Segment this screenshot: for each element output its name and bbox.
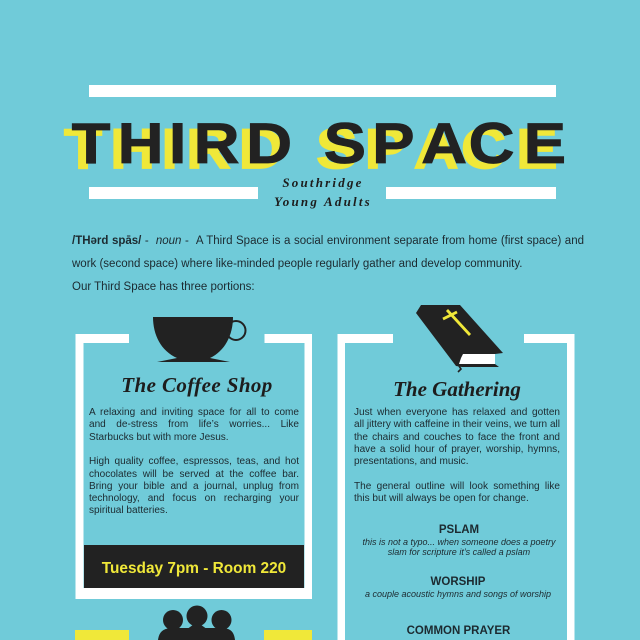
lower right white bar xyxy=(386,187,556,199)
item: Common Prayer: COMMON PRAYER xyxy=(407,625,510,637)
title: THIRD SPACE: THIRD SPACE xyxy=(72,111,566,175)
item: Worship: WORSHIP xyxy=(431,576,485,588)
item: Worship: a couple acoustic hymns and songs of worship xyxy=(365,588,551,598)
yellow frame left piece xyxy=(75,630,129,640)
panel: the gathering xyxy=(338,305,574,640)
icon: bible xyxy=(416,305,503,373)
panel frame: coffee shop xyxy=(76,334,312,599)
item: Pslam: PSLAM xyxy=(439,524,479,536)
icon: group of people xyxy=(158,606,235,640)
top white bar xyxy=(89,85,556,97)
heading: The Coffee Shop: The Coffee Shop xyxy=(121,373,273,397)
schedule banner: Tuesday 7pm - Room 220 xyxy=(102,560,286,577)
coffee shop description: Starbucks but with more Jesus. xyxy=(89,432,229,443)
item: Pslam: slam for scripture it’s called a pslam xyxy=(388,547,530,557)
definition text: Our Third Space has three portions: xyxy=(72,281,255,293)
coffee shop description: High quality coffee, espressos, teas, and hot xyxy=(89,456,299,467)
coffee shop description: technology, and focus on recharging your xyxy=(89,493,299,504)
subtitle: Southridge Young Adults: Southridge xyxy=(282,175,364,190)
definition text: /THərd spās/ - noun - A Third Space is a social environment separate from home (first space) and xyxy=(72,235,584,247)
coffee shop description: and de-stress from life’s worries... Like xyxy=(89,419,299,430)
gathering description: The general outline will look something like xyxy=(354,481,560,492)
definition text: work (second space) where like-minded people regularly gather and develop community. xyxy=(72,258,522,270)
schedule banner xyxy=(84,545,304,588)
gathering description: Just when everyone has relaxed and gotten xyxy=(354,407,560,418)
gathering description: this but will always be open for change. xyxy=(354,493,529,504)
panel frame: gathering xyxy=(338,334,574,640)
lower left white bar xyxy=(89,187,258,199)
gathering description: all jittery with caffeine in their veins, we turn all xyxy=(354,419,560,430)
yellow frame right piece xyxy=(264,630,312,640)
item: Pslam: this is not a typo... when someone does a poetry xyxy=(362,536,556,546)
item: Pslam xyxy=(362,524,556,557)
gathering description: the chairs and couches to face the front and xyxy=(354,432,560,442)
gathering description xyxy=(354,407,560,504)
coffee shop description: Bring your bible and a journal, unplug from xyxy=(89,481,299,492)
gathering description: presentations, and music. xyxy=(354,456,468,467)
definition text xyxy=(72,235,584,293)
heading: The Gathering: The Gathering xyxy=(393,377,521,401)
subtitle: Southridge Young Adults: Young Adults xyxy=(274,194,372,208)
item: Worship xyxy=(365,576,551,599)
gathering description: have a solid hour of prayer, worship, hymns, xyxy=(354,444,560,455)
coffee shop description: chocolates will be served at the coffee bar. xyxy=(89,468,299,480)
subtitle: Southridge Young Adults xyxy=(274,175,372,208)
icon: coffee cup xyxy=(153,317,246,362)
panel: the coffee shop xyxy=(76,317,312,599)
coffee shop description xyxy=(89,407,299,516)
coffee shop description: spiritual batteries. xyxy=(89,505,168,516)
coffee shop description: A relaxing and inviting space for all to come xyxy=(89,407,299,418)
panel: third section (partly visible) xyxy=(75,606,312,640)
title: THIRD SPACE: THIRD SPACE xyxy=(64,116,558,180)
